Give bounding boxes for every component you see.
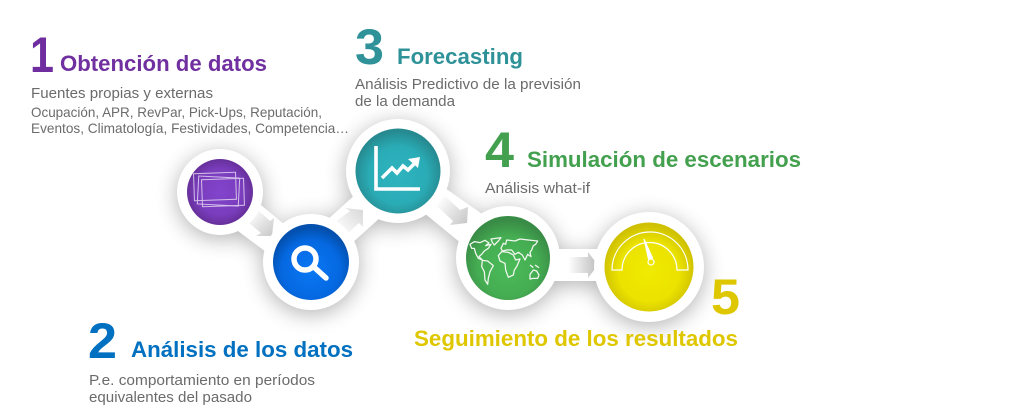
heading: Obtención de datos: Obtención de datos <box>60 51 267 76</box>
connector band 3-4 <box>418 188 485 244</box>
step number 4: 4 <box>485 122 514 178</box>
step number 2: 2 <box>88 313 117 369</box>
heading: Seguimiento de los resultados: Seguimiento de los resultados <box>414 326 738 351</box>
connector band 2-3 <box>325 192 382 245</box>
description: sources: Fuentes propias y externas <box>31 85 213 102</box>
icon: rising line chart <box>376 146 420 189</box>
connector band 1-2 <box>230 200 285 255</box>
step 3 node: teal circle with chart icon <box>346 119 450 223</box>
step 3 text block <box>355 19 581 110</box>
heading: Forecasting: Forecasting <box>397 44 523 69</box>
step 5 node: yellow circle with gauge icon <box>594 212 704 322</box>
arrowhead 4-5 <box>568 252 598 278</box>
step number 5: 5 <box>711 269 740 325</box>
description: data list: Ocupación, APR, RevPar, Pick-Ups, Reputación, <box>31 104 322 120</box>
description: predictive analysis: Análisis Predictivo de la previsión <box>355 76 581 93</box>
description: what-if: Análisis what-if <box>485 180 591 197</box>
step 4 node: green circle with world map icon <box>456 206 560 310</box>
arrowhead 2-3 <box>335 208 363 236</box>
heading: Simulación de escenarios: Simulación de escenarios <box>527 147 801 172</box>
step 5 text block <box>414 269 740 351</box>
icon: stacked frames <box>194 172 244 207</box>
step number 3: 3 <box>355 19 384 75</box>
description: continued: de la demanda <box>355 93 456 110</box>
arrowhead 3-4 <box>436 196 468 225</box>
icon: magnifying glass <box>294 248 326 278</box>
icon: gauge dial <box>612 232 688 270</box>
arrow: step 3 to step 4 <box>418 188 485 244</box>
heading: Análisis de los datos: Análisis de los datos <box>131 337 353 362</box>
description: data list continued: Eventos, Climatología, Festividades, Competencia… <box>31 120 349 136</box>
arrowhead 1-2 <box>248 210 274 236</box>
connector band 4-5 <box>550 249 602 281</box>
step 4 text block <box>485 122 801 197</box>
icon: world map outline <box>470 238 539 284</box>
arrow: step 2 to step 3 <box>325 192 382 245</box>
arrow: step 1 to step 2 <box>230 200 285 255</box>
arrow: step 4 to step 5 <box>550 249 602 281</box>
description: comparable periods: P.e. comportamiento en períodos <box>89 372 315 389</box>
step 2 text block <box>88 313 353 406</box>
step 2 node: blue circle with magnifier icon <box>263 214 359 310</box>
step 1 node: purple circle with frames icon <box>177 149 263 235</box>
step 1 text block <box>30 27 349 136</box>
description: continued: equivalentes del pasado <box>89 389 252 406</box>
drop shadows behind the process chain <box>177 123 704 326</box>
step number 1: 1 <box>30 27 54 83</box>
